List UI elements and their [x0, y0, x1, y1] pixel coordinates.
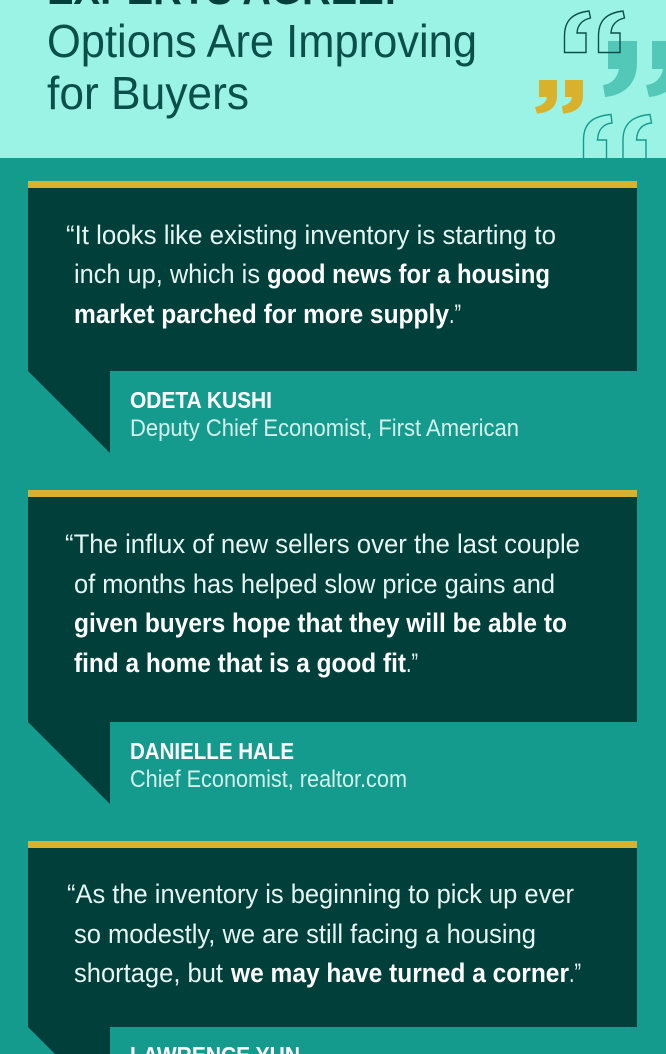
quote text: .”: [406, 648, 418, 678]
quote text: of months has helped slow price gains and: [74, 569, 555, 599]
quote text: find a home that is a good fit: [74, 648, 406, 678]
title: Options Are Improving: [47, 15, 477, 67]
quote text: inch up, which is: [74, 259, 260, 289]
quote text: “It looks like existing inventory is starting to: [66, 220, 556, 250]
quote text: .”: [449, 299, 461, 329]
attribution: Deputy Chief Economist, First American: [130, 415, 519, 442]
icon: outlined dark quotation mark: [564, 11, 624, 52]
header panel: [0, 0, 666, 160]
quote text: shortage, but: [74, 958, 223, 988]
quote text: [67, 879, 581, 988]
quote text: given buyers hope that they will be able to: [74, 608, 567, 638]
quote text: so modestly, we are still facing a housing: [74, 919, 536, 949]
attribution: DANIELLE HALE: [130, 738, 294, 764]
quote text: [66, 220, 556, 329]
quote text: .”: [569, 958, 581, 988]
quote text: market parched for more supply: [74, 299, 449, 329]
attribution: Chief Economist, realtor.com: [130, 766, 407, 793]
icon: teal solid quotation mark: [603, 41, 666, 97]
title: for Buyers: [47, 67, 249, 119]
attribution: [130, 738, 407, 793]
title: [47, 0, 477, 119]
quote card: Danielle Hale: [28, 490, 637, 804]
quote card: Odeta Kushi: [28, 181, 637, 453]
quote text: we may have turned a corner: [230, 958, 569, 988]
attribution: [130, 387, 519, 442]
quote text: “The influx of new sellers over the last couple: [65, 529, 580, 559]
attribution: ODETA KUSHI: [130, 387, 272, 413]
icon: outlined teal quotation mark: [584, 114, 652, 160]
quote text: [65, 529, 580, 678]
icon: gold solid quotation mark: [535, 80, 583, 114]
quote text: “As the inventory is beginning to pick up ever: [67, 879, 574, 909]
quote text: good news for a housing: [267, 259, 550, 289]
quote card: Lawrence Yun: [28, 841, 637, 1054]
